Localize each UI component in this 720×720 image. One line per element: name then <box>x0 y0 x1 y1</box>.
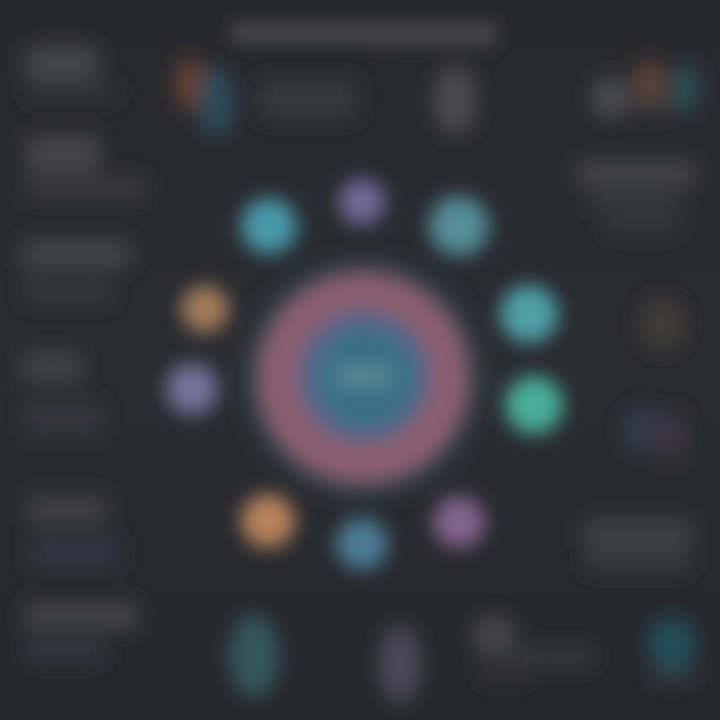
heading <box>232 22 496 49</box>
node: purple lower right <box>433 496 485 548</box>
text block 6 <box>24 602 138 664</box>
centre label <box>336 366 390 386</box>
outer ring <box>257 272 469 484</box>
node: green right <box>505 376 563 434</box>
bottom right icon <box>648 618 696 684</box>
top centre small icon <box>433 64 477 136</box>
text block 3 <box>22 240 130 304</box>
inner disc <box>313 326 417 430</box>
node: teal right <box>500 285 558 343</box>
top centre text <box>258 78 358 120</box>
node: orange left <box>181 285 229 333</box>
bottom text <box>472 614 595 682</box>
bottom icon row <box>229 614 696 704</box>
right icon lower <box>622 406 687 464</box>
text block 4 <box>22 352 104 438</box>
top left icon <box>175 58 234 138</box>
central diagram <box>247 262 479 494</box>
satellite nodes <box>166 179 563 570</box>
text block 1 <box>26 46 120 100</box>
node: teal upper left <box>241 198 297 254</box>
ring inner shade <box>297 310 429 442</box>
text block 5 <box>26 494 120 570</box>
left column text blocks <box>22 46 148 664</box>
top right icon group <box>591 60 700 120</box>
right icon middle <box>638 296 686 352</box>
bottom icon grey <box>379 624 421 704</box>
right column text blocks <box>576 160 696 572</box>
text block 2 <box>24 136 148 200</box>
bottom icon teal <box>229 614 279 698</box>
right text block upper <box>576 160 696 234</box>
node: blue bottom <box>336 518 388 570</box>
node: orange lower left <box>241 494 295 548</box>
node: lavender left <box>166 363 218 415</box>
node: teal upper right <box>429 196 489 256</box>
halo <box>247 262 479 494</box>
right text block lower <box>582 518 692 572</box>
node: purple top <box>339 179 385 225</box>
